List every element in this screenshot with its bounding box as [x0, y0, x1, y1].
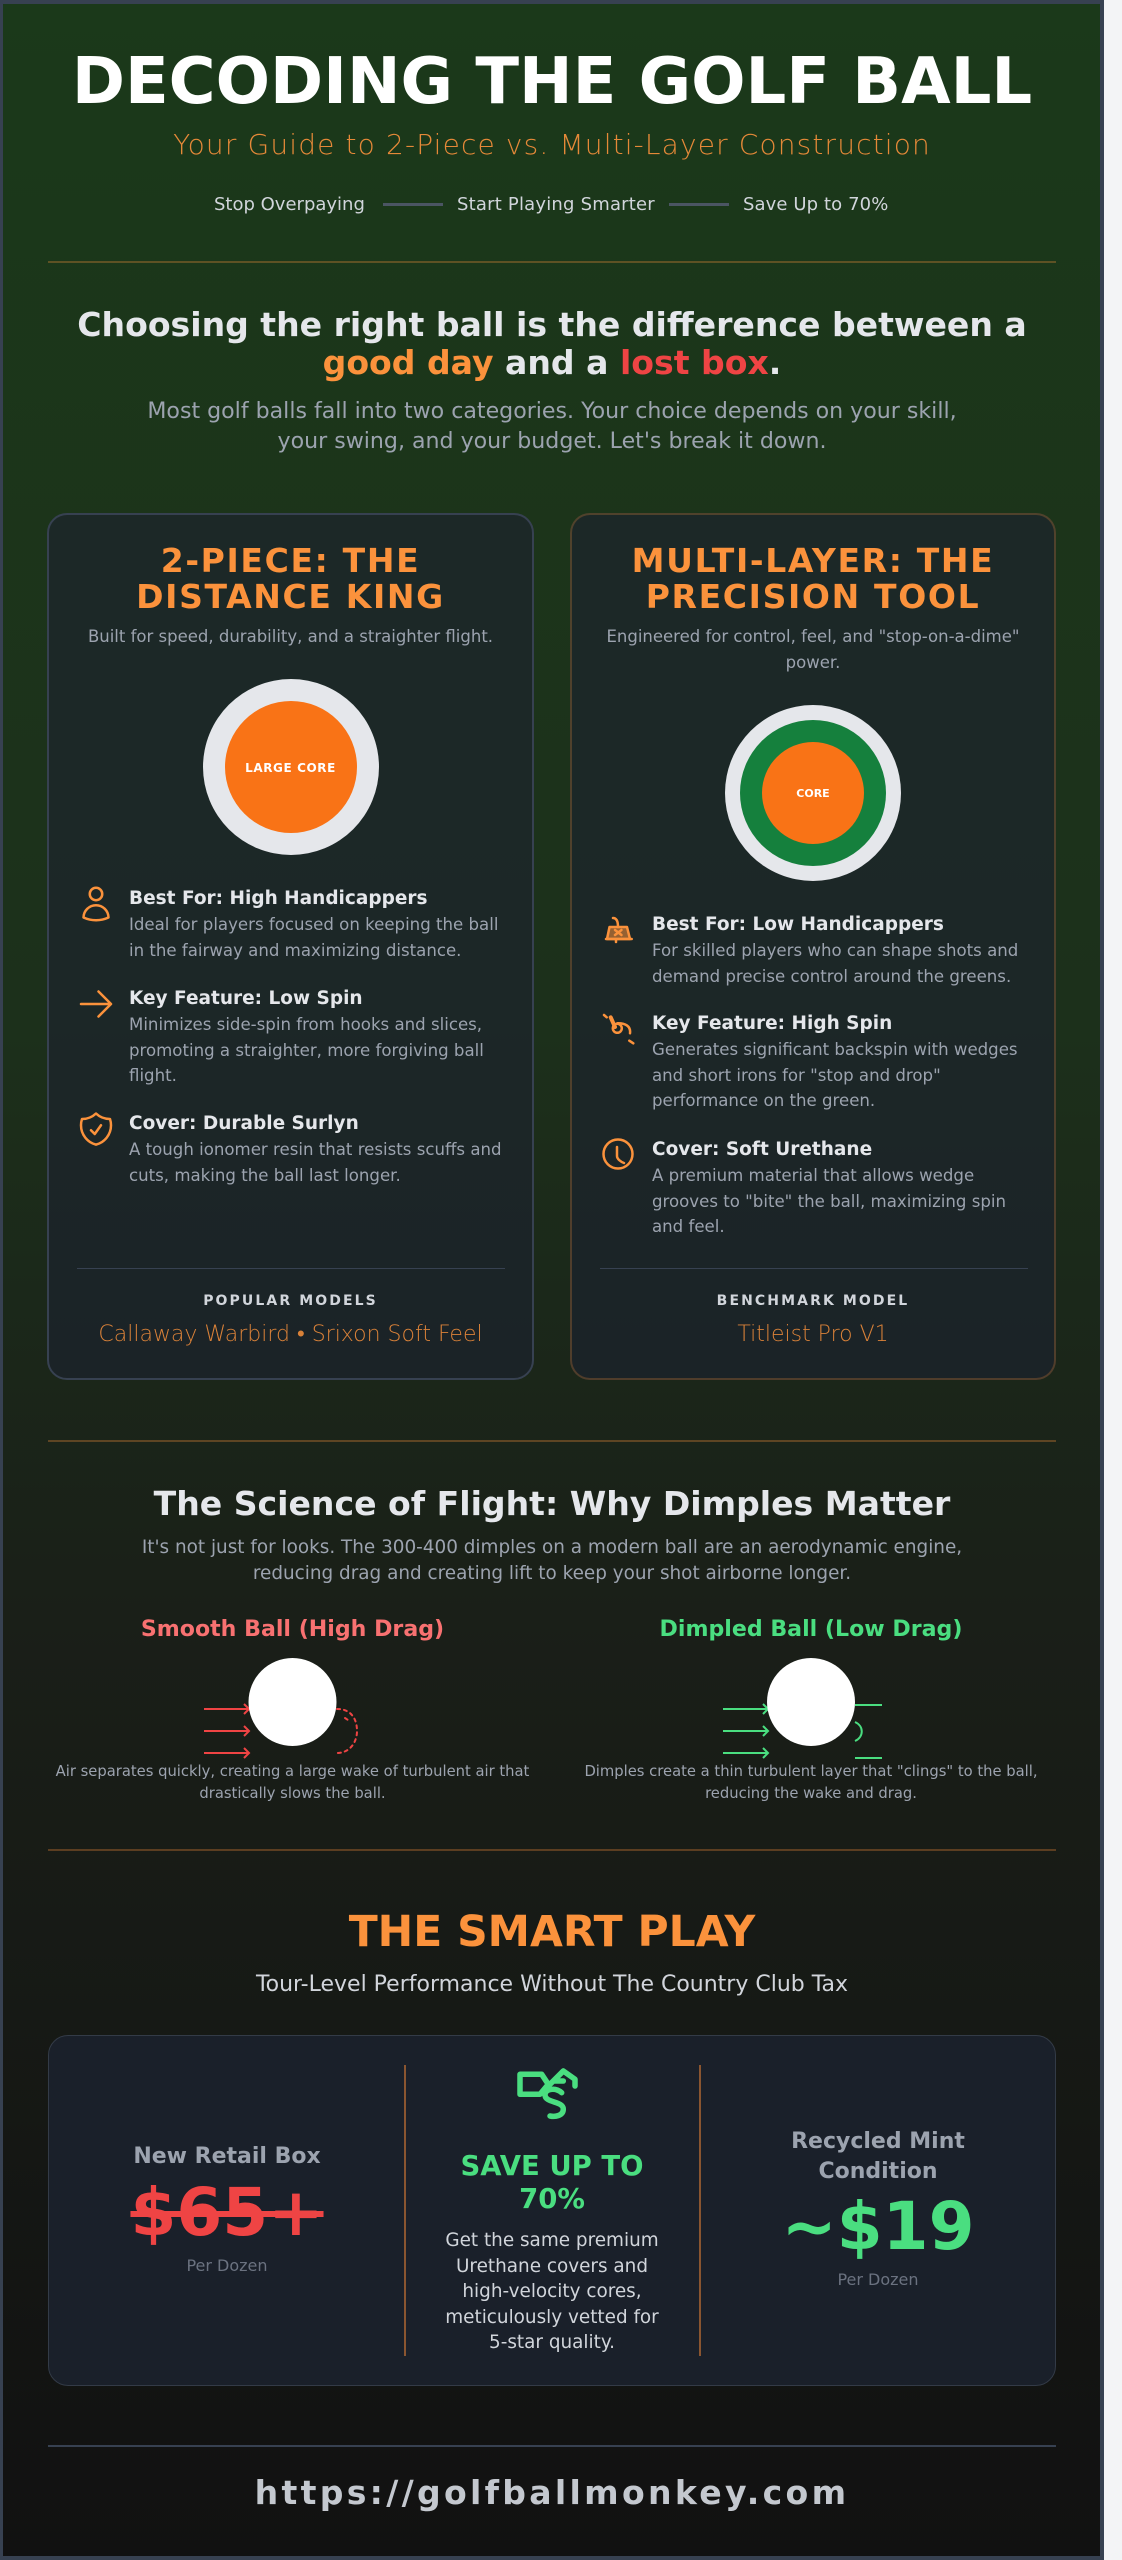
feature text: and short irons for "stop and drop"	[652, 1066, 941, 1085]
label: Recycled Mint	[791, 2129, 965, 2154]
feature: key feature	[80, 988, 484, 1085]
feature text	[129, 888, 498, 960]
footer url: https://golfballmonkey.com	[255, 2473, 849, 2512]
icon: shield	[80, 1112, 112, 1146]
section paragraph: reducing drag and creating lift to keep your shot airborne longer.	[253, 1563, 851, 1584]
label: Condition	[818, 2159, 938, 2184]
feature text: Best For: High Handicappers	[129, 888, 428, 909]
panel: price comparison	[48, 2035, 1056, 2386]
feature text: A premium material that allows wedge	[652, 1166, 974, 1185]
label	[791, 2129, 965, 2184]
feature text: Cover: Soft Urethane	[652, 1139, 872, 1160]
feature: key feature	[602, 1013, 1018, 1110]
card subtitle: Engineered for control, feel, and "stop-on-a-dime"	[606, 627, 1020, 646]
section heading: The Science of Flight: Why Dimples Matter	[154, 1484, 950, 1523]
mantle layer	[740, 720, 886, 866]
ball diagram: two layers	[202, 679, 378, 855]
card heading	[632, 541, 994, 616]
section: science of flight	[56, 1484, 1038, 1802]
icon: player	[604, 916, 633, 944]
feature text: Cover: Durable Surlyn	[129, 1113, 359, 1134]
dimpled ball diagram	[723, 1658, 882, 1759]
label: New Retail Box	[133, 2144, 321, 2169]
feature text: in the fairway and maximizing distance.	[129, 941, 461, 960]
column: savings	[445, 2068, 659, 2353]
price: $65+	[130, 2174, 324, 2251]
savings text: 5-star quality.	[489, 2332, 615, 2353]
feature text: Generates significant backspin with wedges	[652, 1040, 1018, 1059]
feature text	[652, 1013, 1018, 1110]
ball diagram: three layers	[725, 705, 901, 881]
savings text: high-velocity cores,	[462, 2281, 642, 2302]
core	[762, 742, 864, 844]
savings text: meticulously vetted for	[445, 2307, 659, 2328]
feature text	[652, 1139, 1006, 1236]
feature text: Ideal for players focused on keeping the ball	[129, 915, 498, 934]
dimpled ball caption: Dimples create a thin turbulent layer that "clings" to the ball,	[584, 1763, 1038, 1780]
column: recycled mint	[781, 2129, 975, 2289]
feature text: A tough ionomer resin that resists scuffs and	[129, 1140, 502, 1159]
feature text: cuts, making the ball last longer.	[129, 1166, 401, 1185]
feature text: Best For: Low Handicappers	[652, 914, 944, 935]
savings text	[445, 2230, 659, 2353]
feature text: For skilled players who can shape shots and	[652, 941, 1018, 960]
section heading: THE SMART PLAY	[349, 1908, 755, 1957]
feature text: performance on the green.	[652, 1091, 875, 1110]
feature text	[129, 1113, 502, 1185]
smooth ball caption: Air separates quickly, creating a large wake of turbulent air that	[56, 1763, 529, 1780]
icon: savings	[517, 2068, 578, 2120]
savings text: Urethane covers and	[456, 2256, 648, 2277]
section: the smart play	[256, 1908, 848, 1997]
feature text: and feel.	[652, 1217, 725, 1236]
feature: cover	[80, 1112, 502, 1185]
feature text: promoting a straighter, more forgiving ball	[129, 1041, 484, 1060]
large core: LARGE CORE	[245, 761, 336, 775]
price: ~$19	[781, 2188, 975, 2265]
card heading: PRECISION TOOL	[646, 577, 980, 616]
feature text	[652, 914, 1018, 986]
icon: arrow	[80, 990, 112, 1018]
intro paragraph: your swing, and your budget. Let's break it down.	[278, 428, 826, 454]
card heading	[136, 541, 445, 616]
tagline strip: Stop Overpaying	[214, 194, 365, 215]
icon: spin	[602, 1014, 635, 1045]
section subtitle: Tour-Level Performance Without The Country Club Tax	[256, 1972, 848, 1997]
feature text: demand precise control around the greens.	[652, 967, 1011, 986]
panel: 2-piece	[47, 513, 534, 1380]
popular models label: POPULAR MODELS	[203, 1293, 378, 1309]
savings heading: 70%	[519, 2183, 585, 2215]
dimpled ball label: Dimpled Ball (Low Drag)	[660, 1616, 962, 1642]
intro heading	[77, 305, 1027, 382]
unit: Per Dozen	[186, 2256, 268, 2275]
intro heading: good day and a lost box.	[323, 343, 781, 382]
savings text: Get the same premium	[445, 2230, 659, 2251]
benchmark model label: BENCHMARK MODEL	[717, 1293, 909, 1309]
card subtitle	[606, 627, 1020, 672]
intro	[77, 305, 1027, 454]
dimpled ball caption: reducing the wake and drag.	[705, 1785, 917, 1802]
smooth ball diagram	[204, 1658, 358, 1759]
feature: best for	[604, 914, 1018, 986]
header	[72, 45, 1032, 215]
feature: cover	[602, 1138, 1006, 1236]
section paragraph	[142, 1537, 962, 1584]
feature: best for	[82, 886, 498, 960]
intro paragraph	[147, 398, 957, 454]
savings heading: SAVE UP TO	[460, 2150, 644, 2182]
smooth ball caption: drastically slows the ball.	[199, 1785, 386, 1802]
smooth ball caption	[56, 1763, 529, 1802]
smooth ball label: Smooth Ball (High Drag)	[141, 1616, 444, 1642]
card subtitle: Built for speed, durability, and a straighter flight.	[88, 627, 493, 646]
card heading: 2-PIECE: THE	[161, 541, 420, 580]
feature text: flight.	[129, 1066, 177, 1085]
popular models: Callaway Warbird • Srixon Soft Feel	[98, 1322, 483, 1347]
savings heading	[460, 2150, 644, 2215]
feature text: grooves to "bite" the ball, maximizing spin	[652, 1192, 1006, 1211]
icon: clock	[602, 1138, 634, 1170]
card subtitle: power.	[786, 653, 840, 672]
section paragraph: It's not just for looks. The 300-400 dimples on a modern ball are an aerodynamic engine,	[142, 1537, 962, 1558]
feature text: Key Feature: Low Spin	[129, 988, 363, 1009]
tagline strip: Save Up to 70%	[743, 194, 888, 215]
tagline strip	[214, 194, 888, 215]
panel: multi-layer	[570, 513, 1056, 1380]
dimpled ball caption	[584, 1763, 1038, 1802]
card heading: MULTI-LAYER: THE	[632, 541, 994, 580]
card heading: DISTANCE KING	[136, 577, 445, 616]
unit: Per Dozen	[837, 2270, 919, 2289]
subtitle: Your Guide to 2-Piece vs. Multi-Layer Construction	[173, 128, 931, 161]
feature text: Minimizes side-spin from hooks and slices,	[129, 1015, 482, 1034]
feature text: Key Feature: High Spin	[652, 1013, 892, 1034]
title: DECODING THE GOLF BALL	[72, 45, 1032, 119]
tagline strip: Start Playing Smarter	[457, 194, 655, 215]
feature text	[129, 988, 484, 1085]
intro heading: Choosing the right ball is the difference between a	[77, 305, 1027, 344]
column: new retail box	[130, 2144, 324, 2275]
benchmark model: Titleist Pro V1	[737, 1322, 889, 1347]
intro paragraph: Most golf balls fall into two categories. Your choice depends on your skill,	[147, 398, 957, 424]
large core	[224, 701, 356, 833]
core: CORE	[796, 787, 830, 800]
icon: user	[82, 886, 110, 922]
